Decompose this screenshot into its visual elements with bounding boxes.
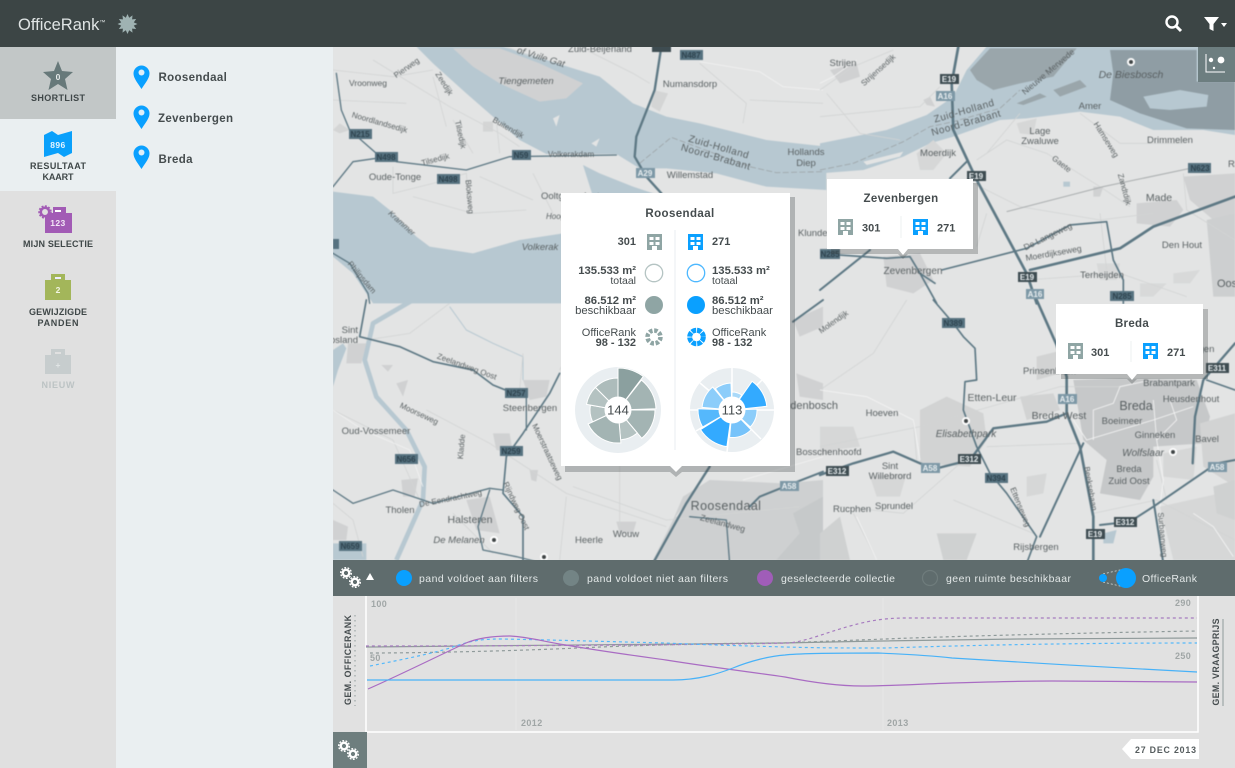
map [312,40,1235,565]
map place labels: Zuid-Holland [933,98,996,126]
legend item: voldoet: pand voldoet aan filters [419,573,538,585]
map road shields [333,44,1229,551]
map place labels: Bosschenhoofd [796,447,862,458]
nav item: nieuw [42,349,75,390]
map place labels: Elisabethpark [936,429,997,440]
map place labels: Breda West [1032,410,1086,422]
map place labels: Zeelandweg [699,512,747,534]
right column stats: totaal [712,275,738,287]
date tag [1122,739,1199,759]
legend item: geen ruimte: geen ruimte beschikbaar [946,573,1072,585]
right column stats: beschikbaar [712,305,773,317]
map road shields: N257 [506,389,526,398]
legend item: geen ruimte [922,570,1072,586]
location: Roosendaal: Roosendaal [158,72,227,84]
icon: search [1166,16,1181,31]
map place labels: De Langeweg [1022,220,1074,252]
map place labels: Sint [882,461,899,472]
map place labels: Tiengemeten [498,76,554,87]
map road shields: A58 [782,482,797,491]
map place labels: Kladde [456,433,467,460]
map road shields: N394 [986,474,1006,483]
map place labels: Tholen [385,505,415,516]
left column stats: 135.533 m² [578,265,636,277]
map place labels: Diep [796,158,816,169]
logo text: OfficeRank [18,16,99,34]
map place labels: Roosendaal [691,499,761,513]
map place labels: Noord-Brabant [680,142,752,173]
legend item: voldoet niet: pand voldoet niet aan filters [587,573,728,585]
legend item: geselecteerde collectie: geselecteerde collectie [781,573,895,585]
nav item: gewijzigde panden: PANDEN [38,318,78,328]
nav item: gewijzigde panden: 2 [56,285,61,295]
map place labels: Rijsbergen [1013,542,1059,553]
map place labels: Strijen [830,58,856,69]
icon: logo burst [118,14,138,34]
left column stats: totaal [610,275,636,287]
popup: Zevenbergen: 271 [937,222,955,234]
map place labels: Oudenbosch [776,400,838,412]
map road shields: N498 [376,153,396,162]
logo text: ™ [99,19,105,26]
right column stats: OfficeRank [712,327,767,339]
location: Roosendaal [134,66,227,89]
popup: Zevenbergen [827,179,978,259]
map place labels [312,44,1235,560]
right column stats: 86.512 m² [712,295,764,307]
line: purple solid [368,636,1197,689]
map road shields: E19 [1088,530,1103,539]
nav item: nieuw: + [56,360,61,370]
legend item: OfficeRank [1099,568,1198,588]
map road shields: A58 [923,464,938,473]
map place labels: Pierweg [392,56,421,80]
map road shields: N623 [1190,164,1210,173]
map road shields: E19 [942,75,957,84]
right column stats: 135.533 m² [712,265,770,277]
map place labels: Beeksebaan [1082,466,1099,511]
location: Zevenbergen [134,106,233,129]
map place labels: Sprundel [875,501,913,512]
map place labels: Gaete [1050,154,1073,175]
map road shields: N285 [820,250,840,259]
map place labels: Oud-Vossemeer [342,426,410,437]
map place labels: Steenbergen [503,403,557,414]
axis ticks: 50 [370,653,381,663]
panel: chart toggle button [1198,47,1235,82]
rose chart: 144 [575,367,661,453]
axis ticks: 100 [371,599,387,609]
axis ticks: 2012 [521,718,543,728]
map place labels: Noordlandsedijk [351,110,409,135]
map place labels: Zeelandweg Oost [436,352,499,382]
map road shields: N389 [943,319,963,328]
map place labels: Zwaluwe [1021,136,1059,147]
legend item: voldoet niet [563,570,728,586]
map place labels: Breda [1119,399,1153,413]
map road shields: N259 [501,447,521,456]
nav item: gewijzigde panden [29,274,87,328]
map place labels: Den Hout [1162,240,1202,251]
nav item: resultaat kaart: RESULTAAT [30,161,86,171]
map road shields: A16 [1028,290,1043,299]
map place labels: Nieuwe Merwede [1020,47,1077,97]
map place labels: Hoeven [866,408,898,419]
axis label: left: GEM. OFFICERANK [343,614,353,705]
map place labels: Noord-Brabant [930,108,1002,139]
map road shields: N498 [438,175,458,184]
map place labels: Moorseweg [398,401,440,427]
map place labels: Brabantpark [1143,378,1195,389]
map place labels: Terheijden [1080,270,1124,281]
map road shields: E312 [828,467,847,476]
map place labels: Teteringen [1170,344,1214,355]
map place labels: Volkerak [522,242,560,253]
chart panel [333,596,1235,768]
axis ticks: 290 [1175,598,1191,608]
legend item: voldoet [396,570,538,586]
map place labels: Hollands [788,147,825,158]
map place labels: Prinsenbeek [1023,366,1076,377]
map road shields: N215 [350,130,370,139]
right column stats: 271 [712,236,730,248]
map place labels: Hamseweg [1092,120,1121,159]
map place labels: Amer [1079,101,1101,112]
nav item: nieuw: NIEUW [42,380,75,390]
rose chart: 113: 113 [722,402,742,418]
map place labels: Wouw [613,529,639,540]
location: Breda [134,146,193,169]
map place labels: Ginneken [1135,430,1175,441]
axis ticks [370,598,1191,728]
left column stats: beschikbaar [575,305,636,317]
nav item: shortlist: 0 [56,72,61,82]
map road shields: E312 [960,455,979,464]
map place labels: Drimmelen [1147,135,1193,146]
date tag: 27 DEC 2013 [1135,745,1196,755]
axis ticks: 2013 [887,718,909,728]
map road shields: A16 [938,92,953,101]
map place labels: Tilsedijk [420,151,451,168]
map place labels: Zandtdijk [1116,173,1133,207]
map place labels: Philipsdam [346,260,378,296]
map road shields: N59 [514,151,529,160]
map place labels: of Vuile Gat [515,45,566,70]
line: grey solid [366,638,1197,647]
popup title: Roosendaal [645,208,715,220]
map place labels: Zuid-Holland [687,134,750,162]
popup: Breda: 271 [1167,347,1185,359]
map place labels: Halsteren [448,514,493,526]
rose chart: 144: 144 [607,402,629,418]
map road shields: N659 [340,542,360,551]
map place labels: Molendijk [817,308,851,335]
map place labels: Willebrord [869,471,911,482]
map place labels: Moerstraatseweg [530,422,564,482]
map road shields: E312 [1116,518,1135,527]
map place labels: Numansdorp [663,79,717,90]
map place labels: Breda [1116,464,1142,475]
map minor roads [333,47,1235,560]
nav item: shortlist [0,47,116,119]
nav item: mijn selectie [23,206,93,249]
nav item: mijn selectie: MIJN SELECTIE [23,239,93,249]
panel: sidebar navigation [0,47,116,768]
right column stats: 98 - 132 [712,337,752,349]
left column stats: OfficeRank [582,327,636,339]
map road shields: A58 [1210,463,1225,472]
popup: Breda [1056,304,1208,384]
map place labels: Strijensedijk [859,52,898,88]
map place labels: Heerle [575,535,603,546]
map road shields: A16 [1060,395,1075,404]
map place labels: Rucphen [833,504,871,515]
map place labels: Etten-Leur [967,392,1017,404]
rose chart: 113 [690,368,774,452]
line: grey dashed [370,631,1197,653]
map place labels: Ettenseweg [1008,486,1032,528]
nav item: resultaat kaart: KAART [42,172,74,182]
popup: Breda: 301 [1091,347,1109,359]
map place labels: Willemstad [667,170,713,181]
map place labels: Volkerakdam [548,150,594,159]
line: blue dashed [370,639,1197,666]
location: Zevenbergen: Zevenbergen [158,113,233,125]
map place labels: Sint [342,325,358,336]
legend item: geselecteerde collectie [757,570,895,586]
axis label: right: GEM. VRAAGPRIJS [1211,618,1221,706]
map road shields: N285 [1112,292,1132,301]
map place labels: Bavel [1195,434,1219,445]
map place labels: Zevenbergen [884,266,942,277]
line: blue solid [367,653,1197,680]
legend bar [333,560,1235,596]
nav item: shortlist: SHORTLIST [31,93,86,103]
map place labels: De Eendrachtweg [418,488,483,509]
popup: Breda: Breda [1115,318,1149,330]
map place labels: De Melanen [433,535,485,546]
map place labels: Zeedijk [433,70,455,98]
map place labels: De Biesbosch [1099,69,1164,81]
map highways [333,47,1235,563]
map water and land areas [333,47,1235,560]
header bar [0,0,1235,47]
button: chart settings [333,732,367,768]
map road shields: N656 [396,455,416,464]
map place labels: Zuid Oost [1108,476,1150,487]
legend item: OfficeRank: OfficeRank [1142,573,1198,585]
map road shields: E19 [969,172,984,181]
map place labels: Bloksweg [464,179,475,214]
popup: Zevenbergen: Zevenbergen [864,193,938,205]
icon: settings gears [341,568,360,587]
map place labels: Ooltgensplaat [541,191,600,202]
map place labels: Boeimeer [1102,416,1142,427]
map place labels: Vroonweg [349,78,387,88]
map place labels: Made [1146,192,1172,204]
nav item: resultaat kaart: 896 [50,140,66,150]
map place labels: Oude-Tonge [369,172,421,183]
map place labels: Krammer [386,209,417,238]
map place labels: Surbaanweg [1156,512,1169,558]
map place labels: Tilsedijk [453,120,468,150]
map place labels: Wolfslaar [1122,448,1165,459]
map place labels: Klundert [798,228,834,239]
map place labels: Moerdijk [920,148,956,159]
left column stats: 86.512 m² [584,295,636,307]
map road shields: N487 [681,51,701,60]
map road shields: A29 [638,169,653,178]
line: purple dashed [366,618,1197,646]
map place labels: Hooge [546,212,570,221]
map place labels: Lage [1029,126,1051,137]
map place labels: Zuid-Beijerland [568,44,632,55]
axis ticks: 250 [1175,651,1191,661]
map place labels: Buitendijk [491,115,526,141]
popup: Zevenbergen: 301 [862,222,880,234]
map road shields: E19 [1020,273,1035,282]
map place labels: Heusdenhout [1163,394,1220,405]
left column stats [575,234,663,349]
map road shields: E311 [1208,364,1227,373]
nav item: gewijzigde panden: GEWIJZIGDE [29,307,87,317]
map place labels: Moerdijkseweg [1025,243,1083,263]
popup: Roosendaal [561,193,795,477]
location: Breda: Breda [158,154,193,166]
panel: location list [116,47,333,768]
nav item: mijn selectie: 123 [50,218,66,228]
nav item: resultaat kaart [0,119,116,191]
left column stats: 301 [618,236,636,248]
right column stats [687,234,773,349]
map place labels: Philipsland [312,335,358,346]
icon: filter [1204,17,1227,31]
map place labels: Rijndweg Oost [501,480,532,532]
left column stats: 98 - 132 [596,337,636,349]
